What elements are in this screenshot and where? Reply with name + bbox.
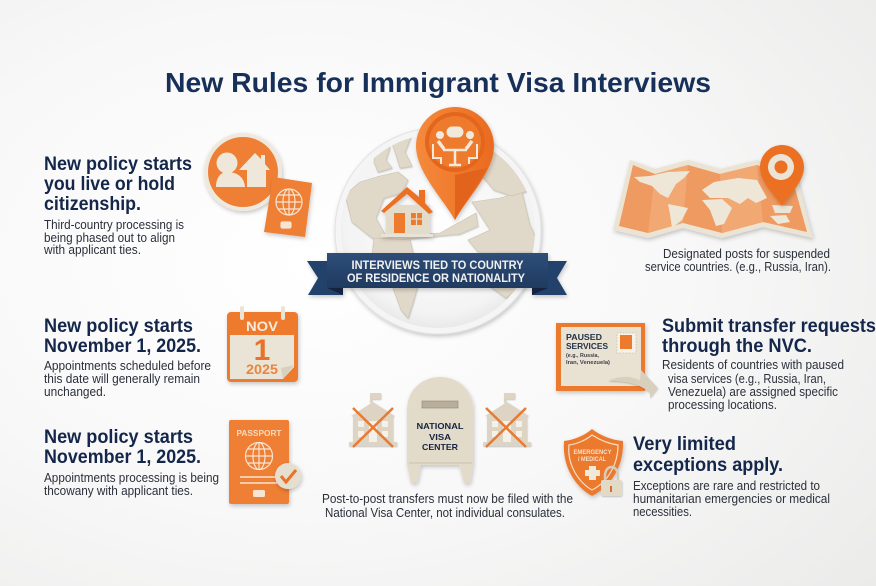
heading: New policy starts [44,154,192,175]
icon: folded world map with pin [613,145,813,238]
caption: National Visa Center, not individual consulates. [325,506,565,520]
body text [43,218,184,257]
body text: Venezuela) are assigned specific [668,385,838,399]
icon: person, house and passport [204,133,312,237]
icon: passport with check [229,420,301,504]
title: New Rules for Immigrant Visa Interviews [165,67,711,98]
heading [44,427,201,468]
heading: you live or hold [44,174,175,195]
heading: Very limited [633,434,736,455]
heading [662,316,876,357]
icon: calendar: NOV [246,318,279,334]
globe sphere [335,128,541,334]
caption [322,492,573,520]
body text: Third-country processing is [44,218,184,232]
icon: shield with lock: EMERGENCY [574,450,612,456]
body text [44,471,219,498]
heading: New policy starts [44,316,193,337]
heading [44,154,192,215]
body text: Appointments scheduled before [44,359,211,373]
heading: citizenship. [44,194,141,215]
icon: envelope: (e.g., Russia, [566,353,600,359]
panel: national visa center [322,377,573,520]
heading: through the NVC. [662,336,812,357]
icon: envelope: SERVICES [566,342,609,351]
icon: calendar [227,306,298,382]
location pin with interview icon [416,107,494,220]
caption: Post-to-post transfers must now be filed with the [322,492,573,506]
body text: unchanged. [44,385,106,399]
icon: shield with lock: / MEDICAL [578,457,606,463]
interview icon [433,127,477,165]
icon: envelope: PAUSED [566,333,602,342]
caption: Designated posts for suspended [663,247,830,261]
icon: crossed-out consulate right [483,393,531,447]
heading [633,434,783,476]
icon: national visa center mailbox [407,377,473,483]
heading: exceptions apply. [633,455,783,476]
heading [44,316,201,357]
panel: designated posts map [613,145,831,274]
body text: visa services (e.g., Russia, Iran, [668,372,826,386]
panel: policy start date [44,306,298,399]
central globe illustration [307,107,567,334]
body text: this date will generally remain [44,372,200,386]
icon: shield with lock [564,429,623,496]
heading: November 1, 2025. [44,336,201,357]
ribbon banner [307,253,567,295]
body text [633,479,830,519]
heading: New policy starts [44,427,193,448]
body text: with applicant ties. [43,243,141,257]
body text: Exceptions are rare and restricted to [633,479,820,493]
panel: transfer requests [556,316,876,412]
icon: national visa center mailbox: NATIONAL [416,421,464,431]
panel: residence or citizenship [43,133,312,257]
body text: processing locations. [668,398,777,412]
caption: service countries. (e.g., Russia, Iran). [645,260,831,274]
house icon [381,187,433,237]
icon: crossed-out consulate left [349,393,397,447]
body text: humanitarian emergencies or medical [633,492,830,506]
body text: being phased out to align [44,231,175,245]
map pin [760,145,804,206]
icon: national visa center mailbox: VISA [429,432,451,442]
ribbon banner: OF RESIDENCE OR NATIONALITY [347,273,525,285]
body text: necessities. [633,505,692,519]
body text: Residents of countries with paused [662,358,844,372]
heading: November 1, 2025. [44,447,201,468]
globe continents [345,137,537,318]
icon: envelope [556,323,658,398]
body text: thcowany with applicant ties. [44,484,193,498]
caption [645,247,831,274]
ribbon banner: INTERVIEWS TIED TO COUNTRY [352,260,524,272]
body text [44,359,211,399]
icon: calendar: 2025 [246,361,278,377]
panel: limited exceptions [564,429,830,519]
map continents [634,171,793,228]
icon: envelope: Iran, Venezuela) [566,360,610,366]
body text: Appointments processing is being [44,471,219,485]
icon: calendar: 1 [254,334,270,367]
icon: national visa center mailbox: CENTER [422,442,458,452]
body text [662,358,844,412]
panel: passport note [44,420,301,504]
icon: passport with check: PASSPORT [236,429,282,438]
